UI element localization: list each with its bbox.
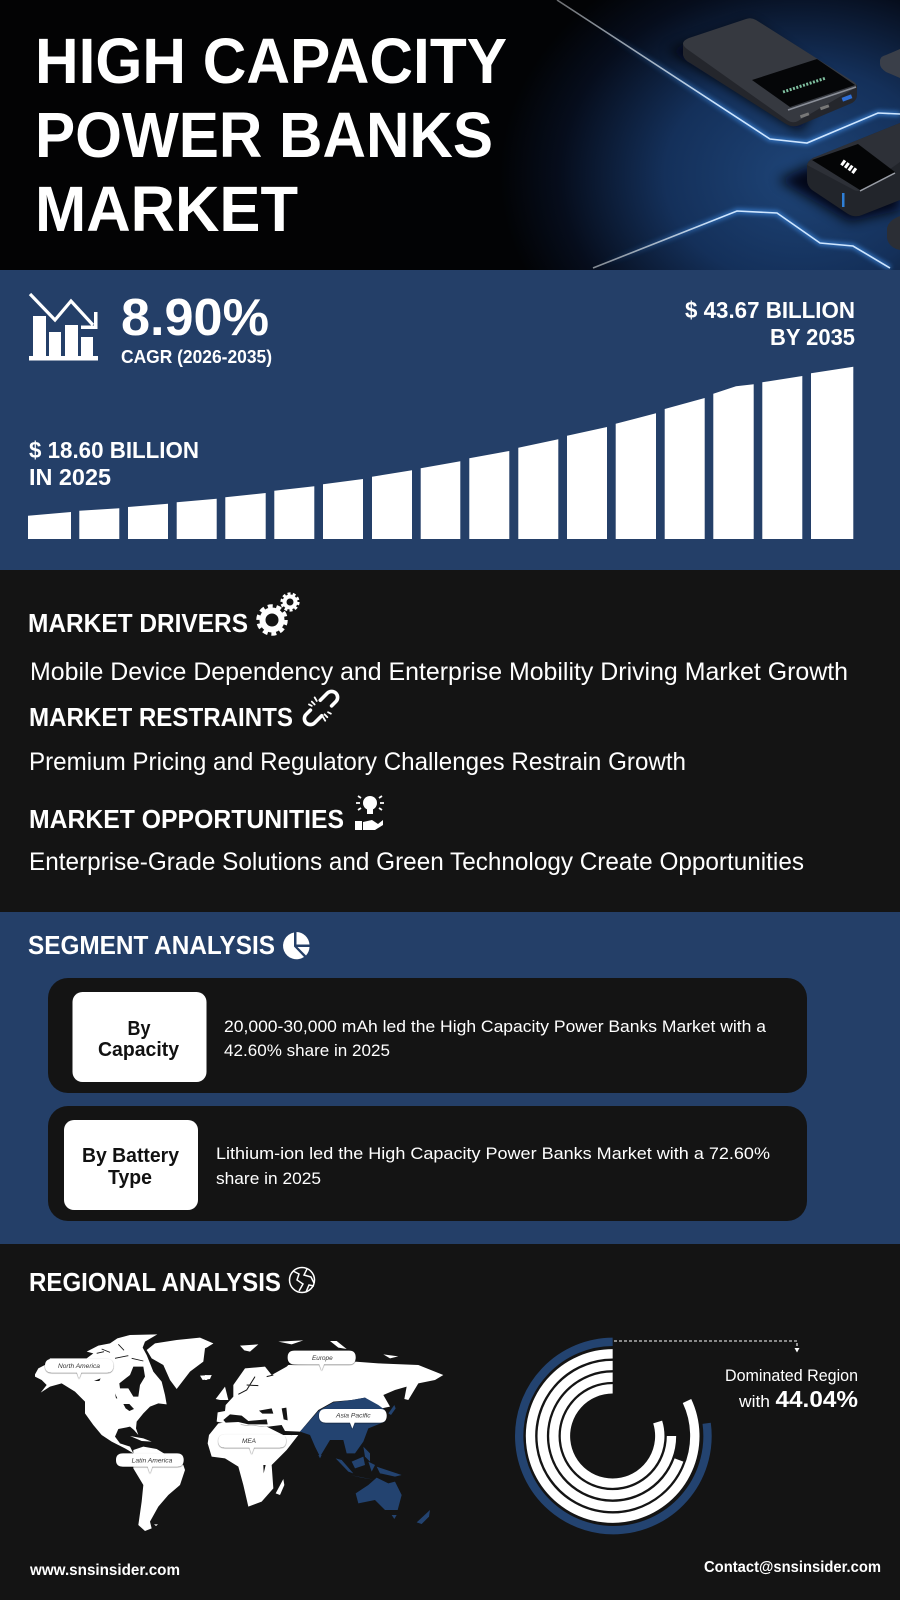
- power bank four: [887, 216, 900, 250]
- card: by battery type: Lithium-ion led the High Capacity Power Banks Market with a 72.60%: [216, 1144, 770, 1163]
- icon: idea hand: [355, 796, 384, 830]
- card: by capacity: 42.60% share in 2025: [224, 1041, 390, 1060]
- restraints text: Premium Pricing and Regulatory Challenges Restrain Growth: [29, 748, 686, 776]
- heading: market drivers: MARKET DRIVERS: [28, 608, 248, 638]
- panel: regional analysis: [0, 1244, 900, 1600]
- opportunities text: Enterprise-Grade Solutions and Green Technology Create Opportunities: [29, 848, 804, 876]
- heading: market restraints: MARKET RESTRAINTS: [29, 702, 293, 732]
- card: by capacity: 20,000-30,000 mAh led the High Capacity Power Banks Market with a: [224, 1017, 767, 1036]
- map: asia pacific: [300, 1398, 430, 1524]
- 2035 value: BY 2035: [770, 324, 855, 350]
- 2025 value: IN 2025: [29, 464, 111, 490]
- drivers text: Mobile Device Dependency and Enterprise Mobility Driving Market Growth: [30, 658, 848, 686]
- title: MARKET: [35, 173, 298, 245]
- callout: mea: [218, 1434, 286, 1454]
- card: by battery type: By Battery: [82, 1145, 180, 1167]
- title: [35, 25, 507, 245]
- callout: mea: MEA: [242, 1438, 257, 1445]
- icon: chart: [29, 294, 98, 360]
- 2025 value: [29, 437, 199, 490]
- header panel: [0, 0, 900, 270]
- arrow: dashed leader: [614, 1341, 800, 1352]
- bar chart: [28, 367, 853, 539]
- heading: regional analysis: REGIONAL ANALYSIS: [29, 1267, 281, 1297]
- contact email: Contact@snsinsider.com: [704, 1559, 881, 1576]
- card: by capacity: [48, 978, 807, 1093]
- map: eurasia and africa: [205, 1340, 443, 1507]
- icon: globe: [290, 1268, 314, 1292]
- 2035 value: [685, 297, 855, 350]
- world map: [35, 1334, 443, 1531]
- CAGR value: 8.90%: [121, 289, 269, 347]
- icon: gears: [258, 594, 298, 634]
- card: by battery type: [48, 1106, 807, 1221]
- icon: pie chart: [283, 932, 310, 959]
- dominated region callout: Dominated Region: [725, 1366, 858, 1385]
- CAGR label: CAGR (2026-2035): [121, 346, 272, 367]
- dominated region callout: [725, 1366, 858, 1412]
- callout: latin america: Latin America: [132, 1458, 173, 1465]
- heading: market opportunities: MARKET OPPORTUNITIES: [29, 804, 344, 834]
- panel: market size: [0, 270, 900, 570]
- icon: broken link: [298, 685, 344, 731]
- callout: north america: North America: [58, 1363, 100, 1370]
- callout: europe: Europe: [312, 1355, 333, 1362]
- dominated region callout: 44.04%: [776, 1386, 858, 1412]
- callout: asia pacific: Asia Pacific: [335, 1413, 371, 1420]
- map: callouts: [45, 1351, 387, 1473]
- callout: europe: [288, 1351, 356, 1370]
- card: by battery type: Type: [108, 1167, 152, 1189]
- title: HIGH CAPACITY: [35, 25, 507, 97]
- panel: market dynamics: [0, 570, 900, 912]
- power bank one: [668, 18, 857, 132]
- power bank two: [778, 123, 900, 222]
- callout: north america: [45, 1359, 113, 1379]
- title: POWER BANKS: [35, 99, 493, 171]
- callout: asia pacific: [319, 1409, 387, 1429]
- callout: latin america: [116, 1453, 184, 1473]
- card: by battery type: share in 2025: [216, 1169, 321, 1188]
- website: www.snsinsider.com: [29, 1562, 180, 1579]
- 2035 value: $ 43.67 BILLION: [685, 297, 855, 323]
- map: americas: [35, 1334, 213, 1531]
- dominated region callout: with: [738, 1392, 770, 1411]
- radial chart: [519, 1342, 708, 1530]
- 2025 value: $ 18.60 BILLION: [29, 437, 199, 463]
- card: by capacity: By: [128, 1018, 151, 1040]
- card: by capacity: Capacity: [98, 1039, 180, 1061]
- panel: segment analysis: [0, 912, 900, 1244]
- glowing lines: [557, 0, 900, 268]
- power bank three: [880, 49, 900, 78]
- heading: segment analysis: SEGMENT ANALYSIS: [28, 930, 275, 960]
